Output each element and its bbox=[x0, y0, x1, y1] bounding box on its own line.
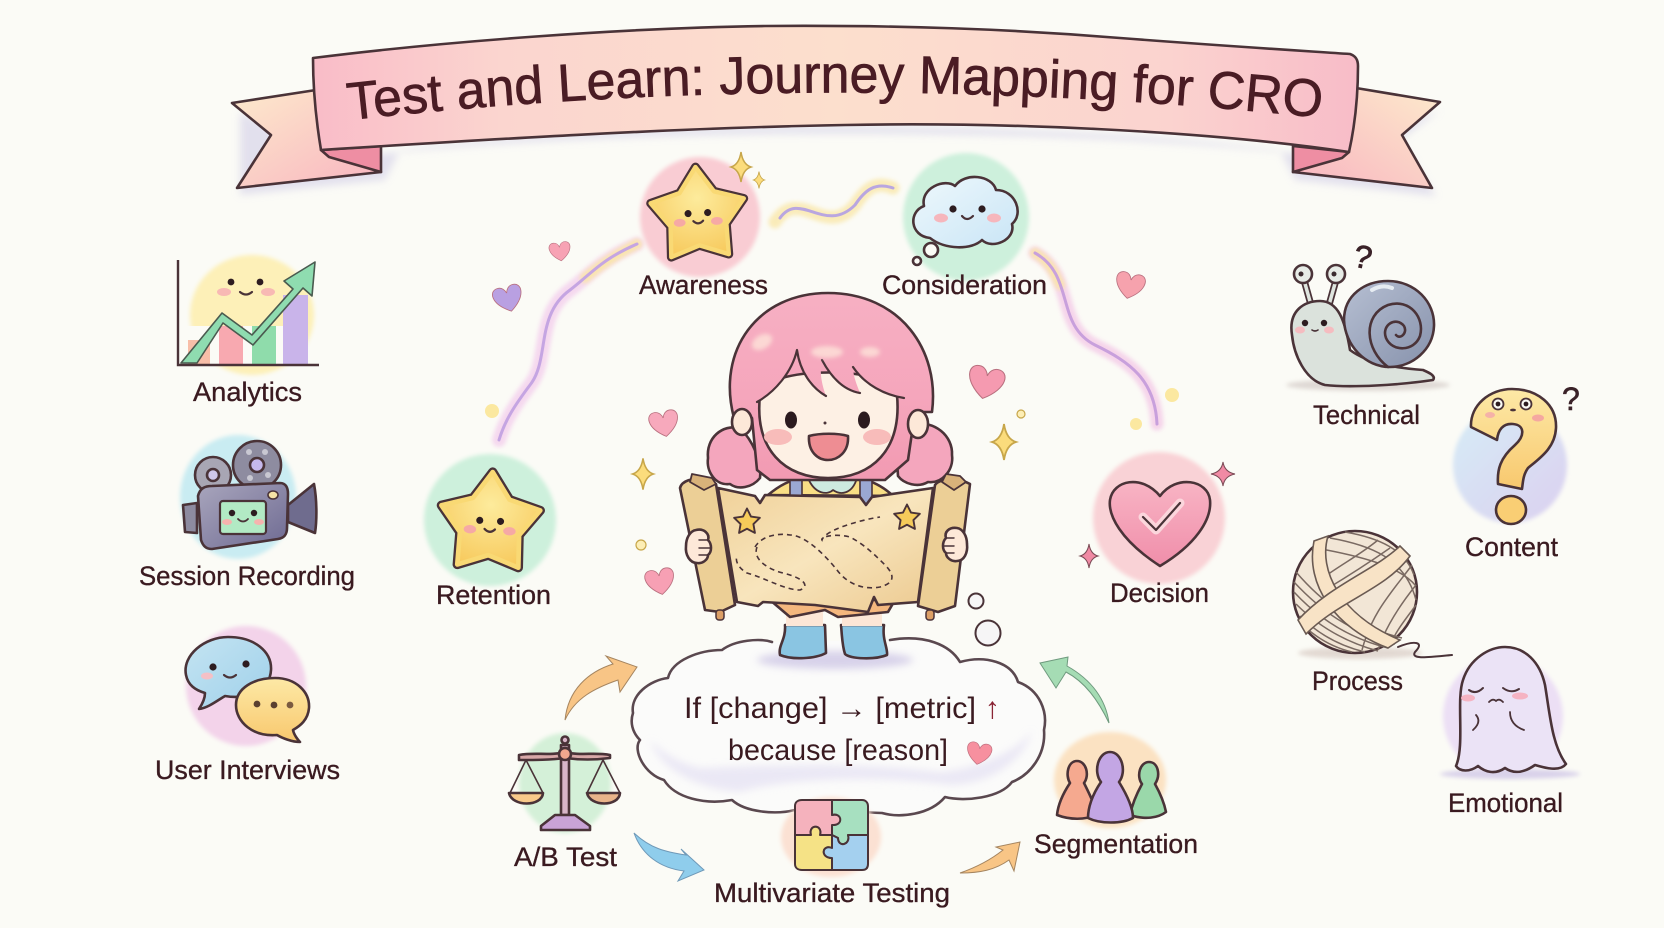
floating sparkles bbox=[633, 410, 1025, 550]
icon: small heart bbox=[965, 741, 993, 766]
question mark: ? bbox=[1562, 381, 1580, 417]
left column: research methods bbox=[139, 255, 355, 785]
multivariate halo bbox=[781, 797, 881, 877]
sparkles bbox=[1080, 462, 1235, 568]
hypothesis text line 1: If [change] → [metric] ↑ bbox=[684, 692, 1000, 725]
map right scroll bbox=[918, 480, 970, 612]
method: user interviews bbox=[155, 626, 340, 785]
mouth bbox=[809, 434, 848, 460]
label: content: Content bbox=[1465, 532, 1558, 562]
emotional halo bbox=[1443, 656, 1563, 776]
retention halo bbox=[424, 454, 556, 586]
icon: thought cloud bbox=[913, 177, 1018, 265]
method: multivariate testing bbox=[714, 797, 950, 908]
banner left fold bbox=[321, 146, 381, 172]
icon: smiling star bbox=[649, 165, 747, 258]
cloud inner shading bbox=[650, 730, 1032, 792]
title banner bbox=[230, 24, 1442, 197]
ground shadow bbox=[1298, 647, 1422, 659]
cloud shape bbox=[632, 638, 1045, 815]
friction: process bbox=[1293, 531, 1452, 696]
method: session recording bbox=[139, 435, 355, 591]
journey ribbon: awareness to consideration bbox=[775, 185, 893, 222]
arrow: multivariate to segmentation bbox=[960, 842, 1020, 873]
friction: technical bbox=[1286, 238, 1450, 430]
overall straps bbox=[790, 476, 872, 505]
consideration halo bbox=[903, 153, 1029, 281]
label: user interviews: User Interviews bbox=[155, 755, 340, 785]
content halo bbox=[1453, 407, 1567, 523]
label: technical: Technical bbox=[1313, 400, 1420, 430]
icon: snail bbox=[1291, 265, 1434, 386]
analytics icon background bbox=[190, 255, 314, 375]
arrow: segmentation to hypothesis bbox=[1040, 657, 1109, 723]
cheeks bbox=[764, 429, 792, 445]
camera halo bbox=[180, 435, 296, 559]
friction: emotional bbox=[1440, 647, 1580, 818]
icon: rising arrow bbox=[181, 262, 315, 363]
icon: question mark character bbox=[1471, 389, 1556, 524]
segmentation halo bbox=[1054, 732, 1166, 828]
map left scroll bbox=[680, 479, 735, 612]
arrow: a/b test to multivariate bbox=[634, 833, 704, 881]
journey ribbon: consideration to decision bbox=[1035, 253, 1179, 430]
icon: ghost bbox=[1456, 647, 1566, 772]
stage: awareness bbox=[639, 152, 768, 300]
banner right fold bbox=[1293, 146, 1349, 172]
nose bbox=[824, 422, 826, 424]
label: decision: Decision bbox=[1110, 578, 1209, 608]
title text bbox=[349, 92, 1323, 120]
hair highlights bbox=[749, 330, 880, 358]
icon: heart with check bbox=[1110, 482, 1210, 566]
label: consideration: Consideration bbox=[882, 270, 1047, 300]
a/b halo bbox=[519, 733, 611, 833]
ground shadow bbox=[1440, 769, 1580, 779]
method: segmentation bbox=[1034, 732, 1198, 859]
title banner: Test and Learn: Journey Mapping for CRO bbox=[346, 56, 1321, 119]
banner shadow bbox=[240, 110, 1440, 196]
journey ribbon: retention to awareness bbox=[485, 244, 637, 440]
right column: friction types bbox=[1286, 238, 1580, 818]
interviews halo bbox=[186, 626, 306, 746]
friction: content bbox=[1453, 381, 1580, 562]
banner main strip bbox=[313, 26, 1358, 152]
awareness halo bbox=[640, 157, 760, 277]
method: a/b test bbox=[509, 733, 620, 872]
label: emotional: Emotional bbox=[1448, 788, 1563, 818]
eyes bbox=[785, 412, 797, 428]
label: analytics: Analytics bbox=[193, 377, 302, 407]
hypothesis cloud bbox=[632, 638, 1045, 815]
shadow at feet bbox=[757, 651, 913, 669]
map main sheet bbox=[718, 488, 933, 612]
bangs outline bbox=[757, 350, 904, 402]
question mark: ? bbox=[1350, 238, 1375, 276]
legs bbox=[786, 605, 823, 626]
map dashed route bbox=[736, 517, 892, 590]
icon: blue speech bubble bbox=[186, 637, 271, 709]
label: a/b test: A/B Test bbox=[514, 842, 618, 872]
test loop bbox=[509, 656, 1198, 908]
ground shadow bbox=[1286, 379, 1450, 391]
hair back bbox=[730, 293, 933, 480]
left hand bbox=[686, 530, 711, 563]
collar bbox=[808, 478, 857, 493]
label: process: Process bbox=[1312, 666, 1403, 696]
shirt bbox=[768, 478, 893, 496]
thought bubbles bbox=[968, 594, 1000, 646]
icon: yellow speech bubble bbox=[236, 678, 309, 742]
right hand bbox=[943, 528, 967, 561]
stage: decision bbox=[1080, 452, 1235, 608]
arrow: a/b test to hypothesis bbox=[565, 656, 637, 720]
stage: retention bbox=[424, 454, 556, 610]
icon: balance scale bbox=[509, 736, 620, 830]
ears bbox=[732, 409, 752, 435]
bangs bbox=[739, 297, 925, 402]
character: girl holding map bbox=[680, 293, 970, 669]
icon: bars bbox=[182, 295, 308, 365]
decision halo bbox=[1093, 452, 1225, 584]
icon: retention star bbox=[438, 469, 542, 569]
face bbox=[759, 372, 898, 478]
chart axes bbox=[178, 260, 319, 365]
method: analytics bbox=[178, 255, 319, 407]
label: retention: Retention bbox=[436, 580, 551, 610]
boots bbox=[780, 625, 826, 658]
icon: puzzle bbox=[795, 800, 868, 870]
floating hearts bbox=[491, 241, 1147, 597]
shorts bbox=[770, 600, 895, 617]
label: session recording: Session Recording bbox=[139, 561, 355, 591]
label: segmentation: Segmentation bbox=[1034, 829, 1198, 859]
stage: consideration bbox=[882, 153, 1047, 300]
icon: group of people bbox=[1057, 752, 1166, 822]
label: multivariate testing: Multivariate Testing bbox=[714, 878, 950, 908]
sparkles bbox=[731, 152, 765, 188]
icon: yarn ball bbox=[1293, 531, 1452, 657]
map stars bbox=[734, 508, 760, 533]
icon: movie camera bbox=[183, 441, 316, 549]
banner left tail bbox=[232, 90, 381, 188]
scroll curls bbox=[690, 474, 966, 620]
icon: face bbox=[217, 279, 275, 296]
pigtails bbox=[708, 427, 760, 487]
banner right tail bbox=[1293, 88, 1440, 188]
hypothesis text line 2: because [reason] bbox=[728, 734, 948, 767]
label: awareness: Awareness bbox=[639, 270, 768, 300]
